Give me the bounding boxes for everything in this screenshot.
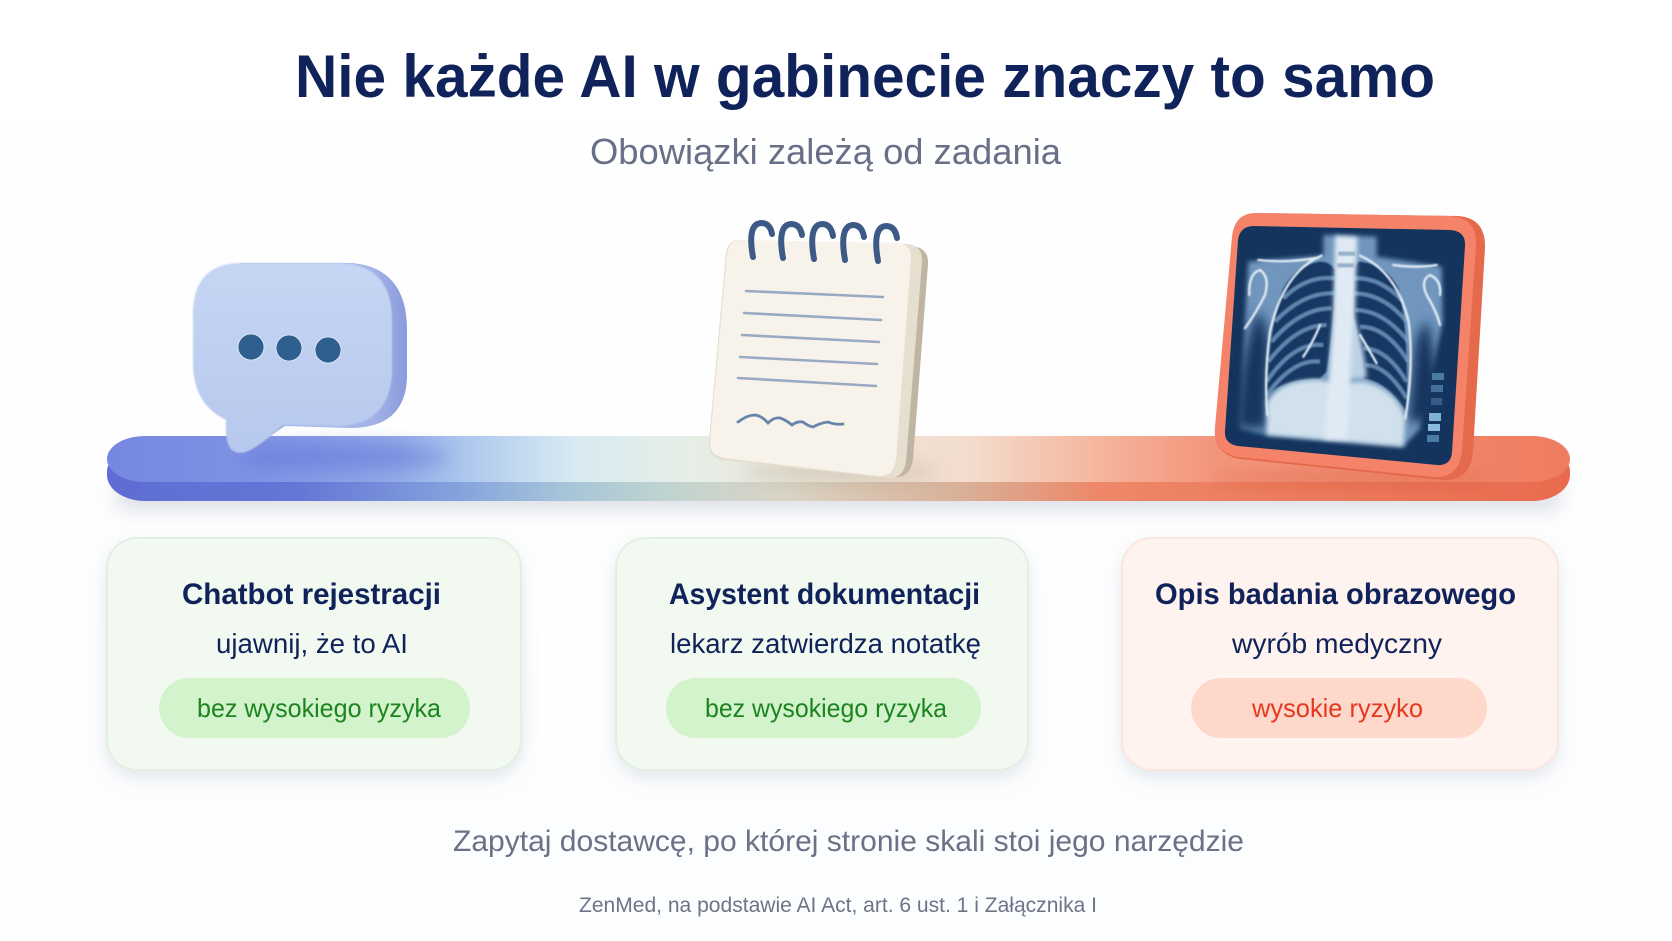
panel: chatbot	[107, 538, 521, 770]
icon: chat bubble	[193, 263, 407, 453]
icon: x-ray monitor	[1215, 213, 1485, 480]
notepad signature	[738, 415, 843, 427]
badge: high risk	[1191, 678, 1487, 738]
text: medical device: wyrób medyczny	[1231, 628, 1442, 659]
badge: low risk: bez wysokiego ryzyka	[705, 693, 948, 723]
badge: low risk	[666, 678, 981, 738]
icon: notepad	[709, 223, 928, 478]
source note: ZenMed, na podstawie AI Act, art. 6 ust. 1 i Załącznika I	[579, 894, 1097, 917]
monitor side buttons	[1427, 373, 1444, 442]
subtitle: Obowiązki zależą od zadania	[590, 131, 1062, 172]
badge: high risk: wysokie ryzyko	[1251, 693, 1423, 723]
notepad lines	[738, 291, 883, 386]
panel: imaging report	[1122, 538, 1558, 770]
heading: chatbot: Chatbot rejestracji	[182, 578, 441, 611]
risk scale bar	[107, 436, 1570, 510]
text: physician approval: lekarz zatwierdza notatkę	[670, 628, 981, 659]
badge: low risk	[159, 678, 470, 738]
text: disclosure: ujawnij, że to AI	[216, 628, 408, 659]
notepad spiral rings	[751, 223, 897, 261]
call to action: Zapytaj dostawcę, po której stronie skali stoi jego narzędzie	[453, 825, 1244, 858]
badge: low risk: bez wysokiego ryzyka	[197, 693, 442, 723]
chat bubble dots	[238, 334, 341, 363]
title: Nie każde AI w gabinecie znaczy to samo	[295, 43, 1435, 110]
chest x-ray image	[1237, 235, 1443, 447]
heading: documentation assistant: Asystent dokumentacji	[669, 578, 980, 611]
heading: imaging report: Opis badania obrazowego	[1155, 578, 1516, 611]
panel: documentation assistant	[616, 538, 1028, 770]
